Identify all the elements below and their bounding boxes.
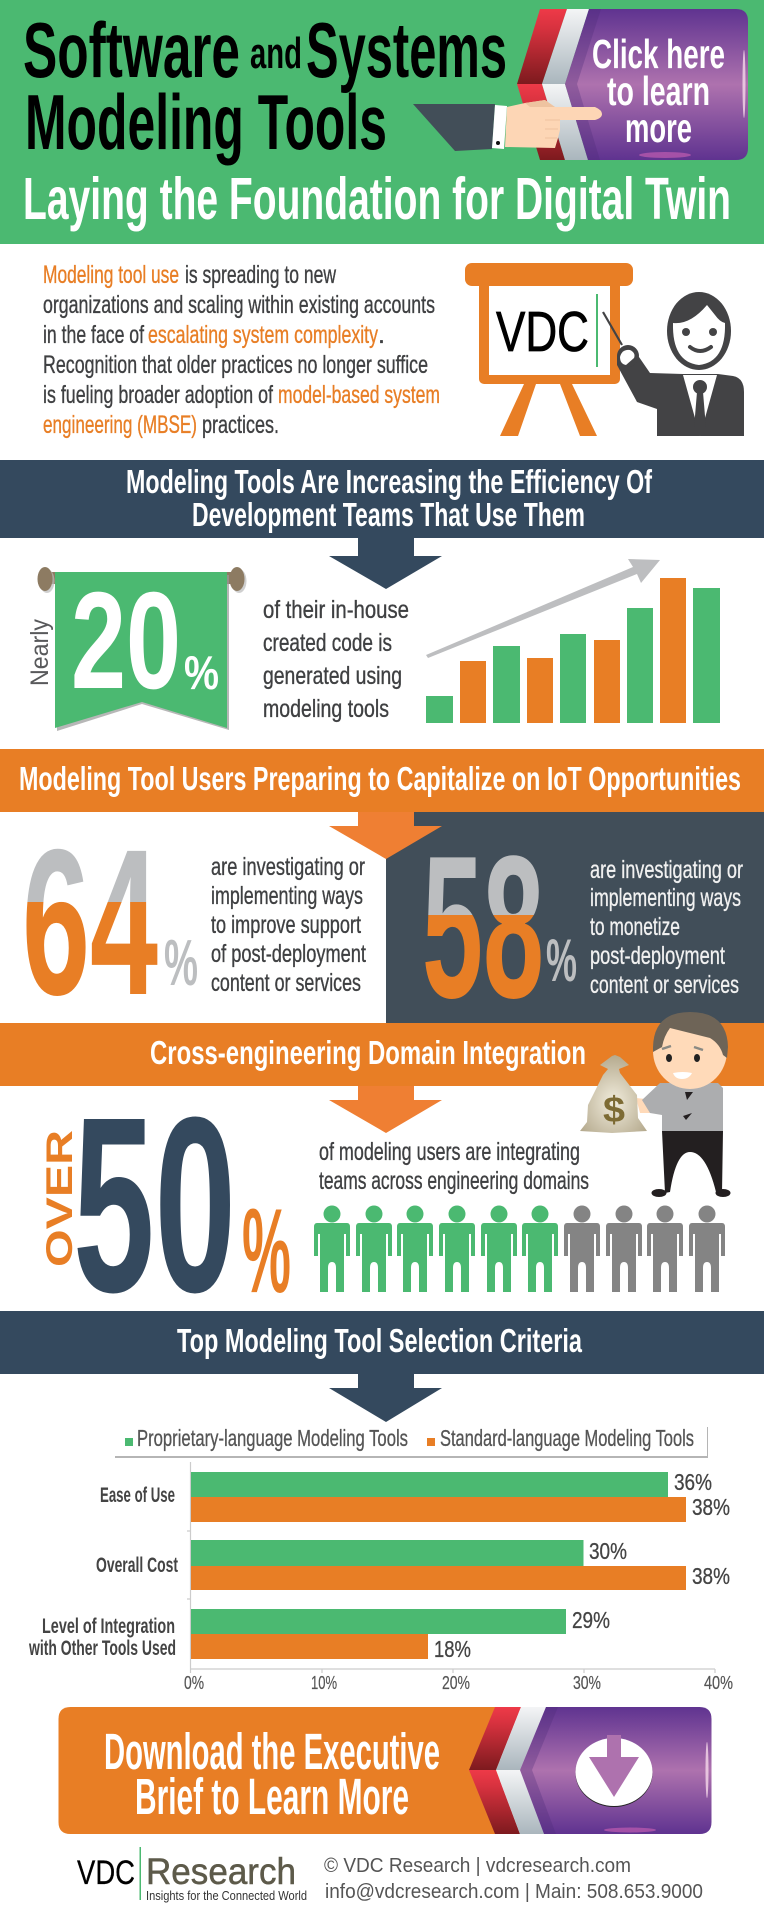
section band: cross-engineering [0, 1023, 764, 1086]
panel: dark right [386, 812, 764, 1023]
button: click here to learn more: to learn [607, 68, 710, 114]
bars: level of integration: with Other Tools Used [28, 1637, 176, 1660]
section band: IoT [0, 749, 764, 812]
intro text block: engineering (MBSE) [43, 411, 197, 439]
axis labels: 40% [704, 1673, 733, 1693]
bars: ease of use [100, 1469, 730, 1522]
pictogram: ten people [314, 1206, 725, 1292]
bars: overall cost [96, 1538, 730, 1590]
title: Systems [306, 6, 507, 94]
text: 64% description [211, 853, 366, 997]
intro text block: is fueling broader adoption of [43, 381, 273, 409]
infographic canvas: % [242, 1184, 291, 1318]
text: integration description [319, 1138, 589, 1195]
intro text block: practices. [202, 411, 279, 439]
stat: 64%: 64 [22, 807, 158, 1039]
bars: level of integration: Level of Integration [42, 1615, 175, 1638]
section band: cross-engineering: Cross-engineering Domain Integration [150, 1034, 586, 1071]
stat: over 50% [39, 1065, 291, 1344]
intro text block [43, 261, 440, 439]
ribbon: nearly 20% [26, 564, 246, 731]
stat: 58%: 58 [422, 814, 544, 1041]
text: 64% description: of post-deployment [211, 940, 366, 968]
icon: download arrow [576, 1735, 652, 1807]
icon: money bag [580, 1055, 647, 1133]
text: in-house code: generated using [263, 662, 402, 690]
intro text block: in the face of [43, 321, 144, 349]
title: Modeling Tools [25, 78, 387, 166]
text: in-house code [263, 596, 409, 723]
text: 64% description: implementing ways [211, 882, 363, 910]
icon: money bag: $ [603, 1089, 625, 1130]
axis labels [184, 1673, 733, 1693]
bars: ease of use: 36% [674, 1469, 712, 1495]
text: in-house code: of their in-house [263, 596, 409, 624]
bars: level of integration: 29% [572, 1607, 610, 1633]
text: 58% description [590, 856, 743, 999]
footer logo: VDC Research: Research [146, 1851, 296, 1892]
section band: efficiency [0, 460, 764, 538]
button: click here to learn more [517, 9, 748, 160]
title [23, 6, 507, 166]
button: click here to learn more: more [625, 105, 692, 151]
icon: presenter [603, 292, 744, 436]
axis labels: 30% [573, 1673, 601, 1693]
section band: selection criteria [0, 1311, 764, 1374]
stat: 64% [26, 848, 197, 996]
text: 64% description: to improve support [211, 911, 361, 939]
bars: overall cost: 30% [589, 1538, 627, 1564]
bars: level of integration [28, 1607, 610, 1662]
stat: over 50%: 50 [73, 1065, 236, 1344]
text: in-house code: modeling tools [263, 695, 389, 723]
arrow: growth trend [426, 559, 660, 658]
intro text block: . [378, 321, 385, 349]
button: download the executive brief: Brief to Learn More [135, 1768, 409, 1825]
footer logo: VDC Research: VDC [77, 1854, 135, 1892]
icon: presentation easel [465, 263, 633, 436]
button: download the executive brief: Download the Executive [104, 1723, 440, 1780]
section band: efficiency: Development Teams That Use Them [192, 496, 585, 533]
footer contact: info@vdcresearch.com | Main: 508.653.9000 [325, 1881, 703, 1903]
ribbon: nearly 20%: 20 [71, 564, 181, 718]
text: in-house code: created code is [263, 629, 392, 657]
axis labels: 20% [442, 1673, 470, 1693]
intro text block: model-based system [278, 381, 440, 409]
bars: ease of use: Ease of Use [100, 1484, 175, 1507]
legend [113, 1424, 708, 1458]
intro text block: escalating system complexity [148, 321, 378, 349]
intro text block: is spreading to new [185, 261, 337, 289]
intro text block: organizations and scaling within existing accounts [43, 291, 435, 319]
legend: Proprietary-language Modeling Tools [137, 1425, 408, 1451]
arrow: down navy 2 [329, 1374, 442, 1422]
button: download the executive brief [58, 1707, 712, 1834]
stat: over 50%: OVER [39, 1130, 80, 1267]
arrow: down navy [329, 538, 442, 589]
ribbon: nearly 20%: Nearly [26, 619, 54, 686]
bars: overall cost: Overall Cost [96, 1554, 178, 1577]
icon: man with money bag [580, 1012, 730, 1197]
header panel [0, 0, 764, 244]
bar chart: growth [426, 559, 720, 723]
text: 64% description: are investigating or [211, 853, 365, 881]
text: integration description: of modeling users are integrating [319, 1138, 580, 1166]
title: Software [23, 6, 240, 94]
stat: 58%: % [546, 927, 577, 994]
text: 64% description: content or services [211, 969, 361, 997]
intro text block: Recognition that older practices no longer suffice [43, 351, 428, 379]
bars: ease of use: 38% [692, 1494, 730, 1520]
axis labels: 10% [311, 1673, 337, 1693]
footer logo: VDC Research: Insights for the Connected World [146, 1888, 307, 1903]
stat: 64%: 64 [22, 807, 158, 1039]
icon: pointing hand [413, 100, 602, 151]
stat: 58%: 58 [422, 814, 544, 1041]
icon: presentation easel: VDC [496, 300, 589, 364]
text: integration description: teams across engineering domains [319, 1167, 589, 1195]
stat: 58% [425, 855, 576, 999]
bars: level of integration: 18% [434, 1636, 471, 1662]
arrow: down orange [329, 812, 442, 859]
arrow: down orange 2 [329, 1086, 442, 1133]
footer logo: VDC Research [77, 1847, 307, 1903]
footer contact: © VDC Research | vdcresearch.com [324, 1855, 631, 1877]
axis labels: 0% [184, 1673, 204, 1693]
title: and [250, 29, 302, 78]
bars: overall cost: 38% [692, 1563, 730, 1589]
bar chart: selection criteria [28, 1462, 733, 1693]
stat: 64%: % [164, 926, 198, 999]
ribbon: nearly 20%: % [184, 646, 219, 699]
text: 58% description: to monetize [590, 913, 680, 941]
intro text block: Modeling tool use [43, 261, 179, 289]
section band: selection criteria: Top Modeling Tool Selection Criteria [177, 1322, 582, 1359]
footer contact [324, 1855, 703, 1903]
